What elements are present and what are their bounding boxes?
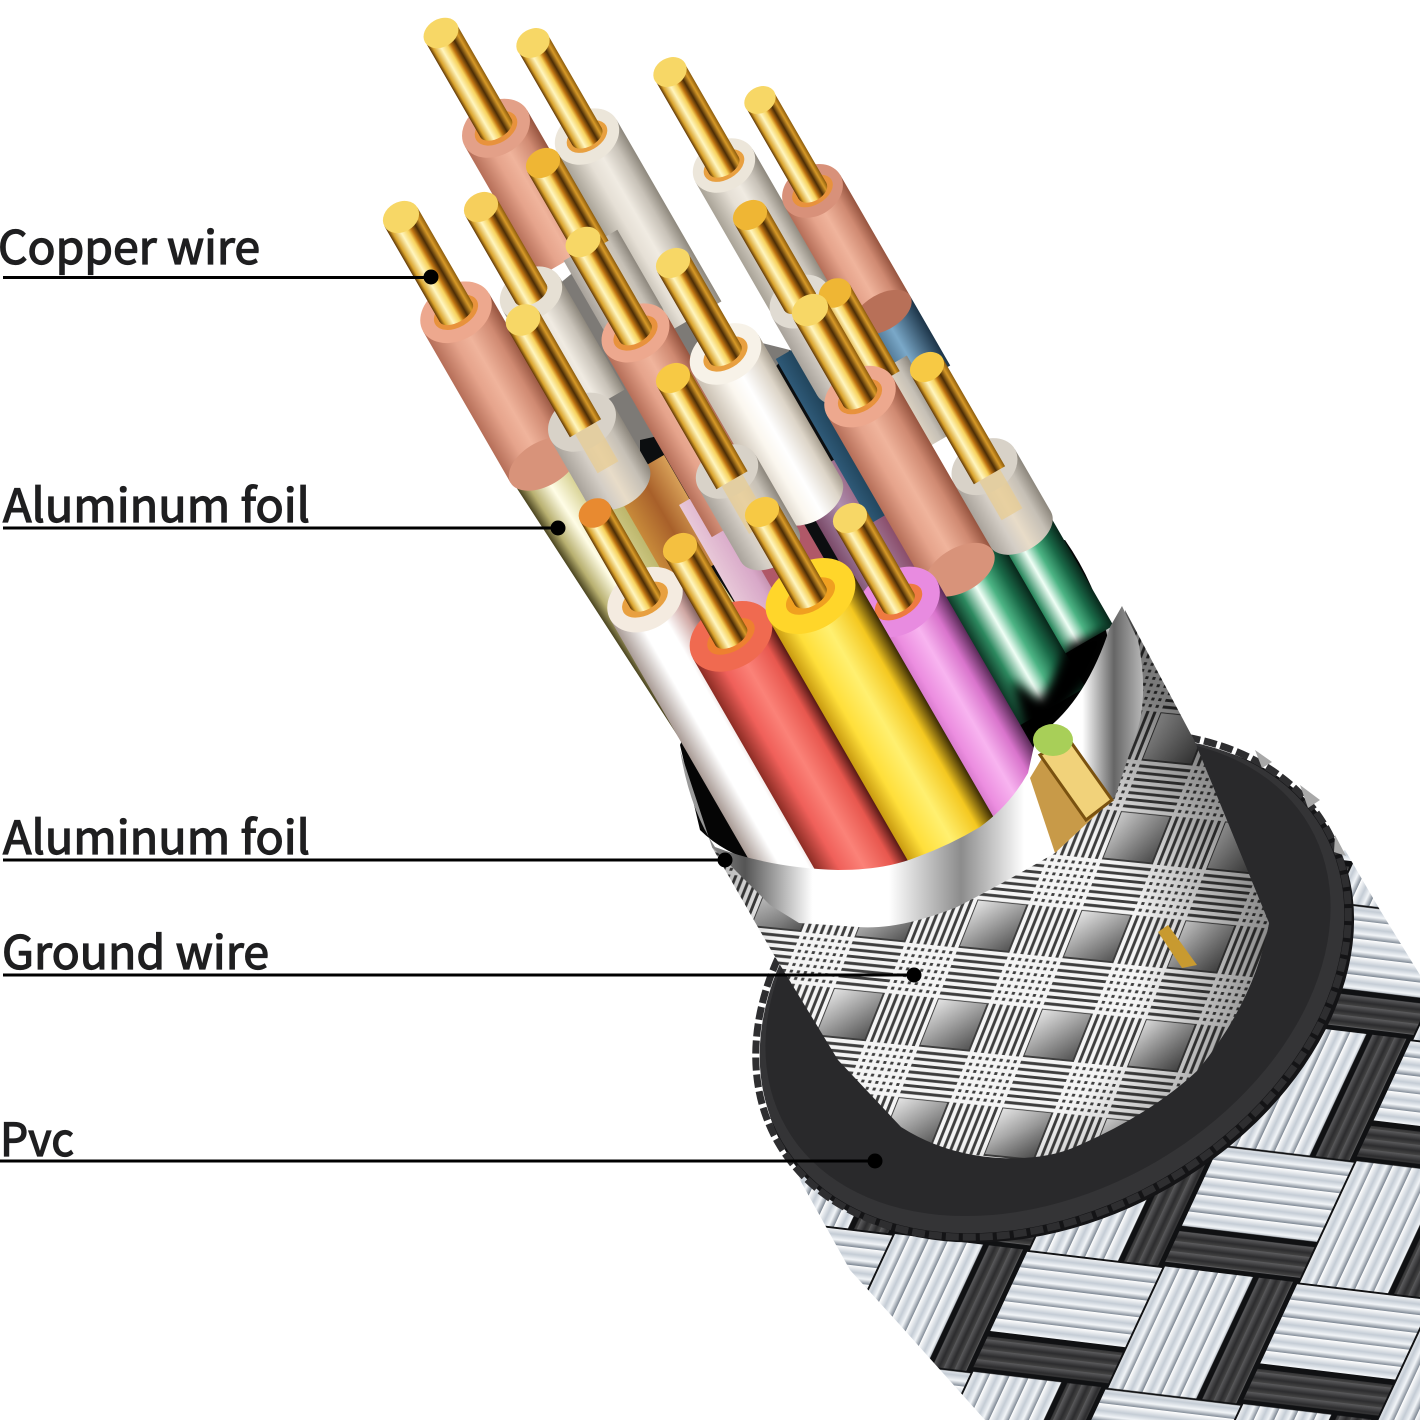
- wire 9 translucent: [484, 289, 660, 522]
- wire 6 translucent: [715, 187, 884, 415]
- foil: pale gold wrap: [505, 405, 796, 764]
- label: Aluminum foil (inner): [3, 470, 566, 536]
- wire 7 salmon: [361, 185, 587, 502]
- label: Pvc: Pvc: [0, 1104, 74, 1170]
- wire 15 translucent: [890, 337, 1062, 565]
- black shadow at wire ends: [1012, 627, 1110, 745]
- wire 11 ivory: [633, 232, 853, 537]
- black PVC ring: [665, 630, 1420, 1345]
- wire 14 translucent: [801, 265, 952, 464]
- label: Aluminum foil (inner): Aluminum foil: [3, 470, 310, 536]
- wire 16 white: [553, 481, 840, 897]
- wire 2 cream: [497, 14, 721, 335]
- wire 8 cream: [445, 178, 625, 423]
- wire 3 cream: [634, 43, 863, 373]
- foil: mauve section: [794, 447, 941, 630]
- label: Copper wire: Copper wire: [0, 212, 260, 278]
- label: Pvc: [0, 1104, 882, 1170]
- wire 5 translucent: [509, 135, 672, 356]
- wire backing: grey core between rear wires: [540, 250, 800, 500]
- label: Aluminum foil (outer): [3, 802, 732, 868]
- wire 19 pink: [805, 484, 1072, 858]
- foil: red-mauve section: [744, 510, 856, 644]
- wire 10 salmon: [545, 212, 774, 537]
- wire 4 salmon and blue: [726, 73, 950, 397]
- wire 1 salmon: [403, 3, 602, 276]
- label: Ground wire: Ground wire: [2, 917, 269, 983]
- ground wire strand: [1030, 724, 1197, 968]
- label: Aluminum foil (outer): Aluminum foil: [3, 802, 310, 868]
- wire 13 salmon: [770, 278, 1004, 608]
- wire 18 yellow: [713, 476, 1022, 914]
- ring rim specks: [1255, 750, 1346, 856]
- shield: woven metal mesh cone: [712, 610, 1269, 1158]
- foil: dark blue section: [776, 331, 919, 524]
- wire backing: dark core between front wires: [640, 350, 1000, 800]
- label: Copper wire: [0, 212, 438, 284]
- braided outer sleeve: [770, 850, 1420, 1420]
- wire 17 red: [635, 514, 919, 918]
- wire green front: [932, 536, 1085, 726]
- wire green rear: [990, 513, 1113, 660]
- foil: lilac section: [679, 475, 816, 652]
- wire 12 translucent: [637, 349, 809, 581]
- dark interior of the shield: [680, 540, 1110, 875]
- label: Ground wire: [2, 917, 922, 983]
- shield: silver foil band: [680, 606, 1143, 927]
- foil: bronze section: [612, 455, 724, 589]
